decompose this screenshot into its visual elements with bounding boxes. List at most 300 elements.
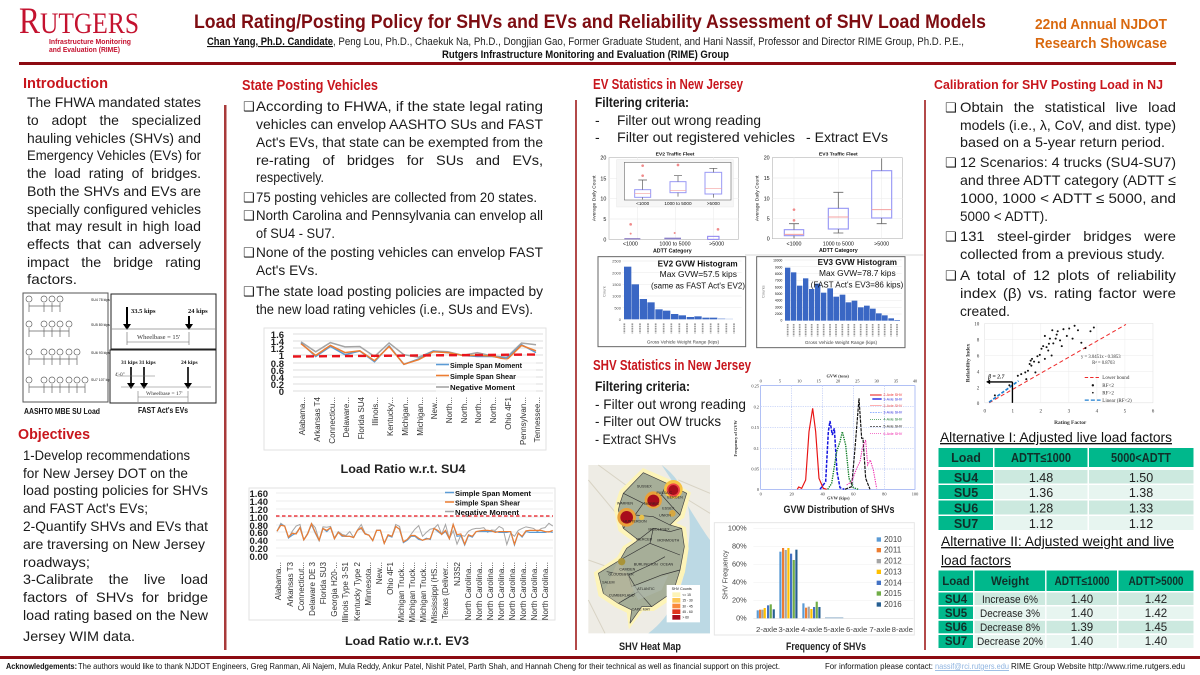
chart: reliability index vs rating factor: 0 <box>983 408 986 414</box>
footer: acknowledgements: Acknowledgements: <box>6 661 77 671</box>
chart: load ratio SU4: Tennessee... <box>533 397 542 442</box>
chart: EV3 traffic fleet boxplot: ADTT Category <box>819 248 858 254</box>
table: alternative I: 1.38 <box>1129 486 1153 500</box>
text: introduction body: The FHWA mandated states <box>27 94 201 110</box>
chart: load ratio EV3: Minnesota... <box>364 562 373 606</box>
text: objectives body: load rating based on the New <box>23 607 209 623</box>
chart: load ratio EV3: North Carolina... <box>519 562 528 620</box>
chart: reliability index vs rating factor <box>966 321 1155 426</box>
diagram: AASHTO MBE SU loads <box>23 293 112 402</box>
chart: load ratio EV3: Texas (Deliver... <box>441 562 450 619</box>
logo: Rutgers RIME: Infrastructure Monitoring <box>49 37 131 46</box>
text: state posting bullets: Act's EVs, that state can be exempted from the <box>256 134 543 150</box>
chart: load ratio EV3: North Carolina... <box>475 562 484 620</box>
diagram: AASHTO MBE SU loads: SU5 80 kips <box>91 323 110 327</box>
chart: GVW distribution: 2-Axle SHV <box>883 404 903 408</box>
map: SHV heat map: ESSEX <box>662 506 675 510</box>
chart: EV3 traffic fleet boxplot: 20 <box>764 156 770 162</box>
chart: GVW distribution <box>733 373 918 501</box>
chart: frequency of SHVs: 60% <box>732 560 747 569</box>
text: EV filtering criteria <box>595 94 888 145</box>
panel: state posting vehicles <box>242 78 543 317</box>
text: state posting bullets <box>243 98 543 317</box>
table: alternative I: 1.33 <box>1129 502 1153 516</box>
text: calibration bullets: ❑ <box>945 156 957 171</box>
showcase label <box>1035 17 1167 52</box>
chart: reliability index vs rating factor: Reliability Index <box>966 343 972 382</box>
chart: GVW distribution: 80 <box>882 492 886 497</box>
chart: EV2 GVW histogram: EV2 GVW Histogram <box>658 260 738 269</box>
map: SHV heat map: CAMDEN <box>619 568 636 572</box>
panel: SHV statistics <box>593 358 751 447</box>
table: alternative II: Weight <box>991 576 1029 588</box>
chart: load ratio EV3: Michigan Truck... <box>397 562 406 622</box>
chart: EV2 traffic fleet boxplot: <1000 <box>623 242 638 248</box>
chart: frequency of SHVs: 2015 <box>884 589 902 598</box>
text: state posting bullets: ❑ <box>243 285 255 300</box>
chart: EV2 traffic fleet boxplot: 1000 to 5000 <box>664 201 692 206</box>
logo: Rutgers RIME: and Evaluation (RIME) <box>49 45 120 54</box>
text: calibration bullets: index (β) vs. rating factor were <box>960 285 1176 301</box>
text: introduction body <box>27 94 201 287</box>
panel: objectives <box>18 427 209 644</box>
text: state posting bullets: ❑ <box>243 191 255 206</box>
text: SHV filtering criteria <box>595 378 746 447</box>
text: objectives body: are traversing on New Jersey <box>23 536 205 552</box>
text: state posting bullets: respectively. <box>256 169 324 185</box>
chart: GVW distribution: 0.05 <box>751 467 759 472</box>
chart: load ratio EV3: North Carolina... <box>486 562 495 620</box>
chart: load ratio SU4: North... <box>460 397 469 423</box>
text: objectives body: for New Jersey DOT on the <box>23 465 188 481</box>
chart: load ratio EV3: 1.40 <box>250 497 268 508</box>
chart: GVW distribution: 0.2 <box>754 404 759 409</box>
chart: GVW distribution: 60 <box>851 492 855 497</box>
chart: load ratio SU4: Pennsylvan... <box>519 397 528 445</box>
chart: GVW distribution: 0.15 <box>751 425 759 430</box>
chart: load ratio EV3: 0.40 <box>250 536 268 547</box>
text: state posting bullets: The state load posting policies are impacted by <box>256 283 543 299</box>
text: calibration bullets: 12 Scenarios: 4 trucks (SU4-SU7) <box>960 154 1176 170</box>
chart: EV3 GVW histogram: (FAST Act's EV3=86 kips) <box>811 281 904 290</box>
chart: GVW distribution: 0 <box>760 378 762 383</box>
chart: load ratio SU4: 0.4 <box>271 373 285 384</box>
chart: GVW distribution: Frequency of GVW <box>733 420 738 456</box>
chart: EV2 GVW histogram <box>598 257 746 347</box>
text: state posting bullets: ❑ <box>243 246 255 261</box>
diagram: AASHTO MBE SU loads: SU7 107 kips <box>91 378 112 382</box>
showcase label: 22nd Annual NJDOT <box>1035 17 1167 33</box>
chart: EV3 GVW histogram: 4000 <box>775 299 782 303</box>
chart: GVW distribution: 25 <box>855 378 859 383</box>
chart: frequency of SHVs: 5-axle <box>823 625 845 634</box>
chart: GVW distribution: 4-Axle SHV <box>883 418 903 422</box>
chart: EV3 traffic fleet boxplot: 0 <box>767 237 770 243</box>
heading: EV statistics: EV Statistics in New Jersey <box>593 77 743 93</box>
chart: load ratio SU4: North... <box>474 397 483 423</box>
chart: EV3 traffic fleet boxplot: Average Daily Count <box>755 175 761 221</box>
chart: reliability index vs rating factor: 6 <box>977 354 980 360</box>
map: SHV heat map: BURLINGTON <box>634 562 658 566</box>
chart: EV3 GVW histogram: Gross Vehicle Weight Range (kips) <box>805 340 878 345</box>
chart: load ratio SU4: Michigan... <box>416 397 425 436</box>
map: SHV heat map: SHV Counts <box>672 587 692 591</box>
map: SHV heat map: UNION <box>659 514 671 518</box>
map: SHV heat map: MIDDLESEX <box>648 528 670 532</box>
chart: load ratio EV3: Mississippi (HS... <box>430 562 439 623</box>
chart: EV3 GVW histogram: 10000 <box>773 259 782 263</box>
text: SHV filtering criteria: - Extract SHVs <box>595 431 676 447</box>
caption: GVW chart: GVW Distribution of SHVs <box>784 504 894 516</box>
chart: EV3 traffic fleet boxplot: EV3 Traffic Fleet <box>819 152 858 158</box>
table: alternative II: Decrease 20% <box>977 636 1043 648</box>
chart: GVW distribution: 100 <box>912 492 918 497</box>
text: objectives body: Jersey WIM data. <box>23 628 135 644</box>
chart: load ratio EV3: New... <box>375 562 384 584</box>
table: alternative II: Load <box>942 576 970 588</box>
chart: load ratio EV3: Michigan Truck... <box>419 562 428 622</box>
chart: load ratio SU4: Illinois... <box>371 397 380 426</box>
chart: GVW distribution: 3-Axle SHV <box>883 397 903 401</box>
chart: EV2 GVW histogram: 500 <box>614 305 622 310</box>
text: introduction body: specially configured vehicles <box>27 201 201 217</box>
diagram: FAST Act EV3: 31 kips <box>121 360 138 366</box>
text: introduction body: that may result in high load <box>27 218 201 234</box>
caption: frequency chart: Frequency of SHVs <box>786 641 866 653</box>
chart: GVW distribution: 10 <box>797 378 801 383</box>
chart: load ratio SU4: Ohio 4F1 <box>504 396 513 430</box>
chart: load ratio EV3: Florida SU3 <box>319 561 328 604</box>
caption: heat map: SHV Heat Map <box>619 641 681 653</box>
diagram: FAST Act EV3: Wheelbase = 17' <box>146 391 182 397</box>
chart: load ratio EV3 <box>249 488 555 623</box>
chart: EV3 GVW histogram: 3000 <box>775 305 782 309</box>
caption: EV3 chart: Load Ratio w.r.t. EV3 <box>345 634 469 648</box>
chart: EV3 GVW histogram: 5000 <box>775 292 782 296</box>
table: alternative I: SU6 <box>954 502 978 516</box>
table: alternative I: 1.50 <box>1129 471 1153 485</box>
chart: frequency of SHVs: SHV Frequency <box>722 550 729 600</box>
text: calibration bullets: models (i.e., λ, CoV, and dist. type) <box>960 117 1176 133</box>
chart: EV2 traffic fleet boxplot: <1000 <box>636 201 650 206</box>
map: SHV heat map: HUNTERDON <box>623 520 647 524</box>
chart: load ratio SU4: 0.6 <box>271 366 284 377</box>
table: alternative II: SU5 <box>945 608 968 620</box>
heading: SHV statistics: SHV Statistics in New Jersey <box>593 358 751 374</box>
chart: EV3 traffic fleet boxplot: 5 <box>767 216 770 222</box>
map: SHV heat map: WARREN <box>617 501 633 505</box>
heading: objectives: Objectives <box>18 427 90 443</box>
diagram: AASHTO MBE SU loads: SU4 78 kips <box>91 298 110 302</box>
table: alternative II: ADTT≤1000 <box>1054 576 1110 588</box>
title: Load Rating/Posting Policy for SHVs and EVs and Reliability Assessment of SHV Load Models <box>194 11 986 33</box>
chart: frequency of SHVs: 40% <box>732 578 747 587</box>
text: state posting bullets: According to FHWA, if the state legal rating <box>256 98 543 114</box>
chart: GVW distribution: 6-Axle SHV <box>883 432 903 436</box>
text: objectives body <box>23 447 209 644</box>
map: SHV heat map: SALEM <box>602 580 615 584</box>
chart: reliability index vs rating factor: 0 <box>977 401 980 407</box>
text: introduction body: hauling vehicles (SHVs) and <box>27 130 201 146</box>
table: alternative I: 5000<ADTT <box>1111 451 1171 465</box>
chart: EV3 GVW histogram <box>757 257 905 348</box>
chart: EV2 traffic fleet boxplot: ADTT Category <box>653 249 692 255</box>
text: state posting bullets: the new load rating vehicles (i.e., SUs and EVs). <box>256 301 533 317</box>
chart: EV3 GVW histogram: 0 <box>780 319 782 323</box>
text: state posting bullets: 75 posting vehicles are collected from 20 states. <box>256 189 537 205</box>
chart: load ratio EV3: NJ3S2 <box>453 561 462 586</box>
text: state posting bullets: Act's EVs. <box>256 262 318 278</box>
chart: load ratio SU4: Kentucky... <box>386 397 395 436</box>
chart: reliability index vs rating factor: 2 <box>977 385 980 391</box>
chart: load ratio EV3: Arkansas T3 <box>286 561 295 607</box>
map: SHV heat map: MONMOUTH <box>657 539 680 543</box>
table: alternative I: 1.28 <box>1029 502 1053 516</box>
text: state posting bullets: None of the posting vehicles can envelop FAST <box>256 244 543 260</box>
chart: load ratio SU4: Arkansas T4 <box>313 396 322 442</box>
chart: GVW distribution: 0 <box>760 492 762 497</box>
chart: EV2 traffic fleet boxplot: 20 <box>600 156 606 162</box>
table: alternative II: Increase 6% <box>982 594 1038 606</box>
table: alternative I: 1.12 <box>1029 517 1053 531</box>
diagram: FAST Act EV2: 24 kips <box>188 308 208 315</box>
map: SHV heat map: <= 15 <box>682 593 691 597</box>
text: state posting bullets: ❑ <box>243 209 255 224</box>
chart: frequency of SHVs: 2012 <box>884 557 902 566</box>
text: objectives body: roadways; <box>23 554 90 570</box>
map: SHV heat map: BERGEN <box>667 496 683 500</box>
chart: GVW distribution: 40 <box>821 492 825 497</box>
chart: load ratio EV3: Michigan Truck... <box>408 562 417 622</box>
table: alternative II: Decrease 8% <box>980 622 1040 634</box>
chart: EV2 GVW histogram: (same as FAST Act's EV2) <box>651 282 745 291</box>
chart: load ratio SU4 <box>264 328 546 450</box>
map: SHV heat map <box>588 465 710 633</box>
chart: load ratio EV3: 1.60 <box>250 489 268 500</box>
text: state posting bullets: of SU4 - SU7. <box>256 225 335 241</box>
chart: EV2 traffic fleet boxplot: 15 <box>600 176 606 182</box>
map: SHV heat map: MORRIS <box>644 502 660 506</box>
text: calibration bullets: Obtain the statistical live load <box>960 99 1176 115</box>
diagram: FAST Act EV3 <box>110 350 216 403</box>
chart: GVW distribution: 40 <box>913 378 917 383</box>
text: introduction body: the load rating of bridges. <box>27 165 201 181</box>
chart: frequency of SHVs: 3-axle <box>778 625 800 634</box>
chart: reliability index vs rating factor: R² = 0.8703 <box>1092 360 1115 366</box>
chart: GVW distribution: 3-Axle SHV <box>883 411 903 415</box>
text: introduction body: effects that can adversely <box>27 236 201 252</box>
chart: GVW distribution: 0 <box>757 487 759 492</box>
text: SHV filtering criteria: Filtering criteria: <box>595 378 690 394</box>
chart: reliability index vs rating factor: 10 <box>974 321 980 327</box>
text: calibration bullets: 131 steel-girder bridges were <box>960 228 1176 244</box>
text: objectives body: and FAST Act's EVs; <box>23 500 148 516</box>
chart: load ratio SU4: Michigan... <box>401 397 410 436</box>
diagram: FAST Act EV2: Wheelbase = 15' <box>137 334 180 341</box>
diagram: FAST Act EV2 <box>111 294 216 349</box>
diagram: FAST Act EV2: 33.5 kips <box>131 308 156 315</box>
footer: contact: RIME Group Website http://www.rime.rutgers.edu <box>1011 661 1185 671</box>
text: state posting bullets: North Carolina and Pennsylvania can envelop all <box>256 207 543 223</box>
chart: reliability index vs rating factor: 8 <box>977 338 980 344</box>
chart: load ratio SU4: 1.6 <box>271 330 284 341</box>
table: alternative II: 1.40 <box>1071 636 1093 648</box>
chart: frequency of SHVs: 0% <box>736 614 747 623</box>
chart: reliability index vs rating factor: 6 <box>1152 408 1155 414</box>
chart: reliability index vs rating factor: 1 <box>1012 408 1015 414</box>
affiliation: Rutgers Infrastructure Monitoring and Evaluation (RIME) Group <box>442 49 729 61</box>
chart: load ratio EV3: 0.00 <box>250 552 268 563</box>
chart: load ratio EV3: Connecticut... <box>297 562 306 611</box>
showcase label: Research Showcase <box>1035 36 1167 52</box>
text: calibration bullets: A total of 12 plots of reliability <box>960 267 1176 283</box>
table: alternative II: 1.42 <box>1145 608 1167 620</box>
chart: EV3 GVW histogram: Max GVW=78.7 kips <box>819 269 896 278</box>
table: alternative II: 1.45 <box>1145 622 1167 634</box>
chart: EV3 GVW histogram: 9000 <box>775 265 782 269</box>
chart: load ratio SU4: 1.2 <box>271 344 284 355</box>
chart: load ratio SU4: 1.4 <box>271 337 285 348</box>
table: alternative I: SU7 <box>954 517 978 531</box>
chart: frequency of SHVs: 6-axle <box>846 625 867 634</box>
text: calibration bullets: ❑ <box>945 269 957 284</box>
text: state posting bullets: vehicles can envelop AASHTO SUs and FAST <box>256 116 543 132</box>
text: EV filtering criteria: - Extract EVs <box>806 129 888 145</box>
chart: load ratio SU4: North... <box>489 397 498 423</box>
heading: state posting vehicles: State Posting Vehicles <box>242 78 378 94</box>
chart: EV2 GVW histogram: 1500 <box>612 282 622 287</box>
chart: load ratio SU4: 1 <box>279 351 285 362</box>
chart: reliability index vs rating factor: Lower bound <box>1102 375 1130 381</box>
chart: reliability index vs rating factor: 5 <box>1124 408 1127 414</box>
table: alternative I: SU4 <box>954 471 978 485</box>
chart: frequency of SHVs: 2-axle <box>756 625 777 634</box>
chart: EV2 GVW histogram: 2500 <box>612 259 622 264</box>
chart: load ratio SU4: Simple Span Shear <box>450 372 516 381</box>
chart: EV2 GVW histogram: 2000 <box>612 270 622 275</box>
caption: AASHTO: AASHTO MBE SU Load <box>24 407 100 416</box>
chart: EV3 traffic fleet boxplot: 15 <box>764 176 770 182</box>
chart: frequency of SHVs: 20% <box>732 596 747 605</box>
diagram: FAST Act EV3: 24 kips <box>181 360 198 366</box>
text: introduction body: factors. <box>27 271 77 287</box>
table: alternative I: 1.36 <box>1029 486 1053 500</box>
map: SHV heat map: CAPE MAY <box>632 608 651 612</box>
text: state posting bullets: re-rating of bridges for SUs and EVs, <box>256 152 543 168</box>
chart: frequency of SHVs: 2014 <box>884 578 902 587</box>
table: alternative II: SU6 <box>945 622 967 634</box>
text: calibration bullets: 5000 < ADTT). <box>960 208 1048 224</box>
chart: EV2 traffic fleet boxplot: Average Daily Count <box>591 175 597 221</box>
table: alternative I: SU5 <box>954 486 978 500</box>
chart: load ratio SU4: New... <box>430 397 439 419</box>
chart: load ratio EV3: 0.20 <box>250 544 268 555</box>
chart: GVW distribution: 5-Axle SHV <box>883 425 903 429</box>
chart: load ratio EV3: 1.00 <box>250 513 268 524</box>
chart: frequency of SHVs: 8-axle <box>892 625 913 634</box>
map: SHV heat map: > 60 <box>682 616 689 620</box>
chart: frequency of SHVs: 80% <box>732 542 747 551</box>
chart: EV2 traffic fleet boxplot: 5 <box>603 217 606 223</box>
text: SHV filtering criteria: - Filter out wrong reading <box>595 396 746 412</box>
chart: load ratio EV3: 0.60 <box>250 528 268 539</box>
chart: EV2 traffic fleet boxplot <box>591 152 738 255</box>
chart: EV3 traffic fleet boxplot: 1000 to 5000 <box>823 241 854 247</box>
chart: GVW distribution: 0.25 <box>751 383 759 388</box>
chart: EV3 traffic fleet boxplot <box>745 152 923 255</box>
text: EV filtering criteria: Filter out registered vehicles <box>617 129 795 145</box>
text: EV filtering criteria: - <box>595 129 600 145</box>
text: SHV filtering criteria: - Filter out OW trucks <box>595 413 721 429</box>
chart: reliability index vs rating factor: 4 <box>977 369 980 375</box>
chart: GVW distribution: GVW (kips) <box>827 496 850 501</box>
table: alternative II: 1.40 <box>1071 594 1093 606</box>
table: alternative II: SU7 <box>945 636 967 648</box>
map: SHV heat map: OCEAN <box>660 562 674 566</box>
heading: alternative I: Alternative I: Adjusted live load factors <box>940 430 1172 445</box>
logo: Rutgers RIME <box>19 1 139 54</box>
table: alternative I: 1.12 <box>1129 517 1153 531</box>
chart: load ratio EV3: Illinois Type 3-S1 <box>341 561 350 623</box>
map: SHV heat map: ATLANTIC <box>637 587 655 591</box>
chart: frequency of SHVs: 2016 <box>884 600 902 609</box>
footer: contact: nassif@rci.rutgers.edu <box>935 661 1009 671</box>
heading: alternative II: Alternative II: Adjusted weight and live <box>941 534 1174 549</box>
chart: GVW distribution: 20 <box>790 492 794 497</box>
panel: introduction <box>23 76 201 287</box>
chart: frequency of SHVs <box>714 523 914 635</box>
table: alternative II: SU4 <box>945 594 968 606</box>
chart: reliability index vs rating factor: 2 <box>1040 408 1043 414</box>
text: calibration bullets: created. <box>960 303 1010 319</box>
chart: load ratio EV3: Ohio 4F1 <box>386 561 395 595</box>
chart: load ratio EV3: Simple Span Moment <box>455 489 532 498</box>
table: alternative I: Load <box>951 451 981 465</box>
map: SHV heat map: SUSSEX <box>637 484 652 488</box>
text: calibration bullets: and three ADTT category (ADTT ≤ <box>960 172 1176 188</box>
chart: load ratio EV3: North Carolina... <box>541 562 550 620</box>
chart: load ratio EV3: 0.80 <box>250 521 268 532</box>
text: introduction body: Emergency Vehicles (EVs) for <box>27 147 201 163</box>
chart: reliability index vs rating factor: 3 <box>1068 408 1071 414</box>
chart: load ratio SU4: 0 <box>279 387 284 398</box>
text: EV filtering criteria: Filtering criteria: <box>595 94 689 110</box>
chart: reliability index vs rating factor: β = 2.7 <box>987 375 1005 381</box>
authors: Chan Yang, Ph.D. Candidate <box>207 36 333 48</box>
chart: EV3 GVW histogram: EV3 GVW Histogram <box>818 258 897 267</box>
chart: EV2 traffic fleet boxplot: >5000 <box>709 242 724 248</box>
chart: load ratio EV3: North Carolina... <box>508 562 517 620</box>
chart: EV2 GVW histogram: Max GVW=57.5 kips <box>660 270 737 279</box>
chart: EV2 traffic fleet boxplot: >5000 <box>707 201 720 206</box>
chart: EV2 GVW histogram: 0 <box>619 317 622 322</box>
caption: FAST Act: FAST Act's EVs <box>138 406 188 415</box>
panel: EV statistics <box>593 77 888 145</box>
map: SHV heat map: 15 - 30 <box>682 599 693 603</box>
chart: load ratio SU4: 0.2 <box>271 380 284 391</box>
chart: EV3 GVW histogram: 8000 <box>775 272 782 276</box>
chart: load ratio SU4: Florida SU4 <box>357 396 366 439</box>
caption: SU4 chart: Load Ratio w.r.t. SU4 <box>340 462 466 476</box>
chart: load ratio SU4: 0.8 <box>271 359 284 370</box>
chart: EV2 GVW histogram: Gross Vehicle Weight Range (kips) <box>647 339 720 344</box>
table: alternative II: 1.40 <box>1071 608 1093 620</box>
text: objectives body: factors of SHVs for bridge <box>23 589 208 605</box>
table: alternative I <box>938 448 1194 531</box>
map: SHV heat map: 45 - 60 <box>682 610 693 614</box>
map: SHV heat map: GLOUCESTER <box>608 573 634 577</box>
chart: reliability index vs rating factor: RF<2 <box>1102 383 1114 389</box>
